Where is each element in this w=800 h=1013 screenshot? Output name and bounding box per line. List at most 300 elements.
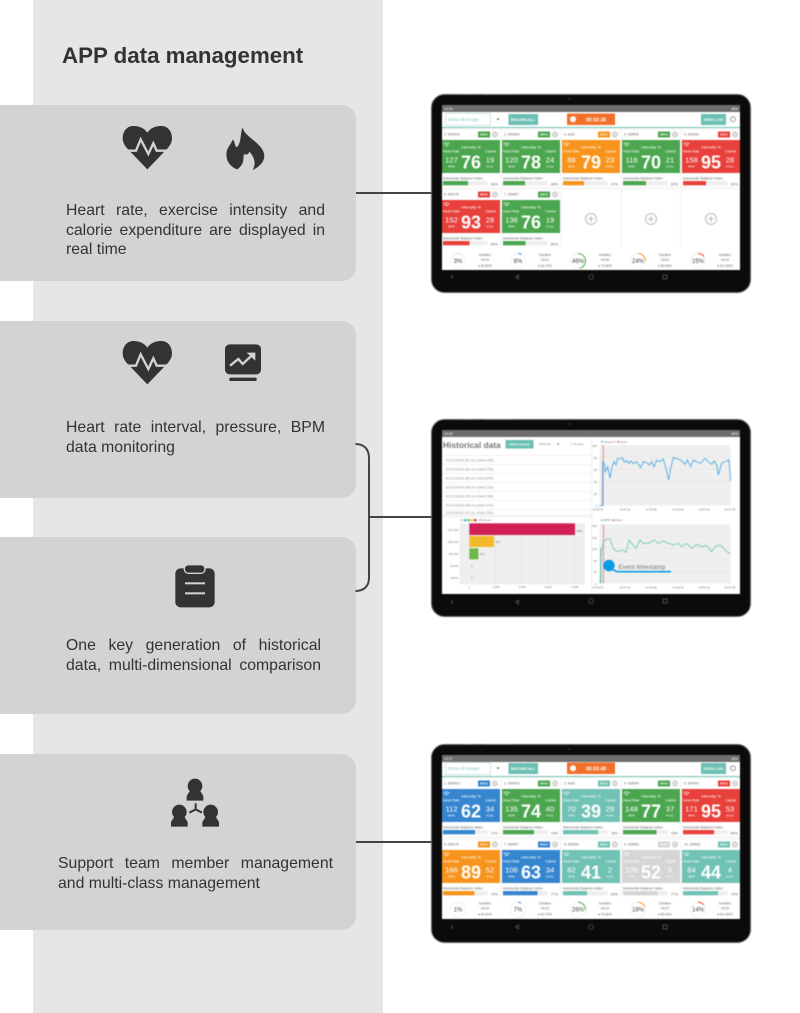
app header: [442, 762, 740, 777]
HR zones bar chart: HR Zones: [478, 518, 492, 522]
card 7: BPM: [508, 224, 515, 228]
zone stats row: 00:10: [601, 907, 609, 911]
card 5: [682, 130, 740, 187]
card 10: 44: [701, 863, 721, 883]
card 5: 5. ID#434: [684, 132, 699, 136]
card 5: Autonomic Balance Index: [683, 176, 723, 180]
zone stats row: Duration: [719, 253, 731, 257]
card 3: Autonomic Balance Index: [563, 826, 603, 830]
zone stats row: ♥ 70-80%: [598, 264, 612, 268]
card 3: 23: [606, 156, 614, 164]
card 2: REC0: [540, 133, 548, 137]
card 2: BPM: [508, 814, 515, 818]
HR zones bar chart: 0: [471, 564, 473, 568]
text: historical data: One key generation of historical: [66, 637, 321, 654]
stress line chart: [592, 440, 736, 512]
card 1: 1. ID#4HO: [444, 782, 460, 786]
card 4: REC0: [660, 133, 668, 137]
card 10: Calorie: [725, 860, 736, 864]
status bar: 14:35: [444, 432, 453, 436]
card 5: Intensity %: [701, 144, 721, 150]
card 2: Autonomic Balance Index: [503, 826, 543, 830]
BPM line chart: 14:15:08: [645, 586, 657, 590]
icon: team: [171, 778, 219, 827]
card 9: 105: [625, 866, 638, 874]
card 2: [502, 779, 560, 836]
zone stats row: 18%: [632, 908, 645, 914]
card 1: Calorie: [485, 150, 496, 154]
card 3: REC0: [600, 782, 608, 786]
card 8: 41: [581, 863, 601, 883]
app header: OPEN LOG: [703, 767, 724, 771]
card 3: 79: [581, 153, 601, 173]
card 4: KCAL: [666, 814, 674, 818]
card 9: Heart Rate: [623, 860, 640, 864]
HR zones bar chart: 95-108: [449, 552, 458, 556]
card 2: KCAL: [546, 814, 554, 818]
zone stats row: Duration: [719, 902, 731, 906]
text: real-time display: [66, 202, 325, 258]
card 2: 70%: [551, 832, 559, 836]
card 9: 5: [668, 866, 672, 874]
HR zones bar chart: 81-95: [451, 564, 458, 568]
card 8: REC0: [600, 843, 608, 847]
card 1: KCAL: [486, 164, 494, 168]
card 8: Heart Rate: [563, 860, 580, 864]
card 4: Autonomic Balance Index: [623, 176, 663, 180]
zone stats row: ♥ 90-100%: [717, 264, 733, 268]
card 5: Heart Rate: [683, 798, 700, 802]
card 6: 52: [486, 866, 494, 874]
card 7: 106: [505, 866, 518, 874]
status bar: 42%: [731, 432, 738, 436]
stress line chart: 15:07:55: [724, 508, 736, 512]
card 3: BPM: [568, 164, 575, 168]
card 4: 52%: [671, 182, 679, 186]
card 7: 19: [546, 216, 554, 224]
card 9: [622, 840, 680, 897]
card 4: [622, 130, 680, 187]
card 10: REC0: [720, 843, 728, 847]
status bar: 46%: [731, 757, 738, 761]
card 6: Intensity %: [461, 854, 481, 860]
stress line chart: 80: [594, 456, 597, 460]
card 10: [682, 840, 740, 897]
text: historical data: [66, 637, 321, 674]
zone stats row: 3%: [454, 259, 463, 265]
file list: 20211126JEL366.csv (Data:1265): [446, 486, 493, 490]
card 2: Heart Rate: [503, 798, 520, 802]
HR zones bar chart: 108-122: [447, 540, 458, 544]
card 8: Intensity %: [581, 854, 601, 860]
BPM line chart: [592, 518, 736, 590]
HR zones bar chart: 122-136: [447, 528, 458, 532]
card 5: Heart Rate: [683, 150, 700, 154]
card 3: 39: [581, 802, 601, 822]
card 7: Calorie: [545, 860, 556, 864]
card 6: KCAL: [486, 224, 494, 228]
HR zones bar chart: 1,000: [492, 585, 500, 589]
card 3: 47%: [611, 182, 619, 186]
card 6: BPM: [448, 874, 455, 878]
card 1: 62: [461, 802, 481, 822]
stress line chart: 60: [594, 468, 597, 472]
stress line chart: 100: [592, 444, 597, 448]
text: historical data: data, multi-dimensional comparison: [66, 657, 321, 674]
card 5: 5. ID#434: [684, 782, 699, 786]
zone stats row: Duration: [539, 253, 551, 257]
card 1: Autonomic Balance Index: [443, 826, 483, 830]
card 7: REC0: [540, 843, 548, 847]
zone stats row: Duration: [479, 902, 491, 906]
icon: heart rate 2: [122, 341, 172, 384]
card 8: KCAL: [606, 874, 614, 878]
card 7: 136: [505, 216, 518, 224]
card 7: KCAL: [546, 224, 554, 228]
view folder button: 7 min avg: [570, 442, 583, 446]
app header: Show All Groups: [448, 117, 479, 122]
icon: flame: [226, 128, 264, 170]
stress line chart: Stress %: [604, 440, 616, 444]
stress line chart: 0: [595, 504, 597, 508]
card 1: [442, 779, 500, 836]
card 7: Heart Rate: [503, 210, 520, 214]
file list: [442, 438, 592, 594]
connector: bracket to tablet: [356, 443, 432, 592]
zone stats row: 24%: [632, 259, 645, 265]
view folder button: [506, 440, 583, 448]
BPM line chart: Event: [615, 518, 623, 522]
card 7: Autonomic Balance Index: [503, 236, 543, 240]
card 4: 21: [666, 156, 674, 164]
card 8: 82: [567, 866, 576, 874]
zone stats row: ♥ 80-90%: [658, 264, 672, 268]
app header: [442, 112, 740, 128]
card 5: 95: [701, 802, 721, 822]
card 6: REC0: [480, 193, 488, 197]
card 3: 78%: [611, 832, 619, 836]
zone stats row: 14%: [692, 908, 705, 914]
card 7: [502, 190, 560, 248]
file list: 20211126JEL359.csv (Data:1394): [446, 494, 493, 498]
card 8: BPM: [568, 874, 575, 878]
card 2: BPM: [508, 164, 515, 168]
card 2: Autonomic Balance Index: [503, 176, 543, 180]
card 5: BPM: [688, 814, 695, 818]
card 2: 74: [521, 802, 541, 822]
card 2: 2. ID#4SD: [504, 132, 520, 136]
navigation buttons: [451, 599, 667, 604]
card 7: BPM: [508, 874, 515, 878]
card 7: 34: [546, 866, 554, 874]
card 2: 120: [505, 156, 518, 164]
app header: Show All Groups: [448, 766, 479, 771]
card 8: 8. ID#526: [564, 842, 579, 846]
card 3: 70: [567, 804, 576, 814]
card 6: 6. ID#176: [444, 842, 459, 846]
card 4: 37: [666, 804, 674, 814]
BPM line chart: 80: [594, 559, 597, 563]
card 2: Heart Rate: [503, 150, 520, 154]
card 3: Autonomic Balance Index: [563, 176, 603, 180]
callout: event timestamp: [603, 560, 671, 572]
zone stats row: 00:01: [541, 258, 549, 262]
status bar: [442, 105, 740, 112]
card 4: [622, 779, 680, 836]
card 1: KCAL: [486, 814, 494, 818]
card 1: Heart Rate: [443, 798, 460, 802]
empty slots: [562, 190, 740, 248]
card 2: Intensity %: [521, 794, 541, 798]
zone stats row: 8%: [514, 259, 523, 265]
stress line chart: 14:50:19: [698, 508, 710, 512]
HR zones bar chart: 4,000: [571, 585, 579, 589]
card 10: BPM: [688, 874, 695, 878]
card 4: Calorie: [665, 798, 676, 802]
card 5: Intensity %: [701, 794, 721, 798]
card 4: 70: [641, 153, 661, 173]
card 7: 7. ID#507: [504, 842, 519, 846]
zone stats row: 26%: [572, 908, 585, 914]
BPM line chart: 13:39:57: [592, 586, 604, 590]
card 5: 158: [685, 156, 698, 164]
zone stats row: 46%: [572, 259, 585, 265]
card 9: 9. ID#583: [624, 842, 639, 846]
card 6: [442, 840, 500, 897]
card 3: KCAL: [606, 164, 614, 168]
card 3: BPM: [568, 814, 575, 818]
tablet: historical data: [430, 418, 752, 618]
card 6: 70%: [491, 892, 499, 896]
card 4: Intensity %: [641, 794, 661, 798]
card 4: 116: [625, 156, 638, 164]
card 8: Calorie: [605, 860, 616, 864]
card 5: 95: [701, 153, 721, 173]
zone stats row: 00:08: [601, 258, 609, 262]
stress line chart: 40: [594, 480, 597, 484]
card 7: Heart Rate: [503, 860, 520, 864]
card 3: Calorie: [605, 150, 616, 154]
card 3: 3. test1: [564, 132, 575, 136]
icon: clipboard: [175, 565, 215, 608]
card 1: Autonomic Balance Index: [443, 176, 483, 180]
card 3: Calorie: [605, 798, 616, 802]
card 5: Calorie: [725, 798, 736, 802]
zone stats row: 00:07: [661, 907, 669, 911]
BPM line chart: 14:50:19: [698, 586, 710, 590]
card 8: 2: [608, 866, 612, 874]
status bar: 46%: [731, 107, 738, 111]
card 9: 77%: [671, 892, 679, 896]
card 3: [562, 130, 620, 187]
status bar: 14:34: [444, 107, 453, 111]
card 4: KCAL: [666, 164, 674, 168]
BPM line chart: 0: [595, 582, 597, 586]
view folder button: Show All: [539, 442, 551, 446]
HR zones bar chart: [447, 518, 585, 589]
historical data heading: Historical data: [443, 440, 501, 450]
card 5: KCAL: [726, 164, 734, 168]
callout: event timestamp: Event timestamp: [618, 564, 666, 571]
card 1: REC0: [480, 133, 488, 137]
card 4: 4. ID#509: [624, 782, 639, 786]
zone stats row: 00:00: [481, 258, 489, 262]
file list: 20211126JEL357.csv (Data:1300): [446, 511, 493, 515]
text: real-time display: real time: [66, 241, 127, 258]
card 3: 29: [606, 804, 614, 814]
card 5: 171: [685, 804, 698, 814]
card 2: KCAL: [546, 164, 554, 168]
card 2: Calorie: [545, 150, 556, 154]
BPM line chart: 14:32:43: [672, 586, 684, 590]
zone stats row: ♥ 90-100%: [717, 913, 733, 917]
HR zones bar chart: 0: [471, 576, 473, 580]
card 10: Intensity %: [701, 854, 721, 860]
file list: 20211126JEL380.csv (Data:3295): [446, 476, 493, 480]
card 10: 4: [728, 866, 732, 874]
card 2: 135: [505, 804, 518, 814]
zone stats row: ♥ 60-70%: [538, 264, 552, 268]
card 3: 88: [567, 156, 576, 164]
file list: 20211126JEL358.csv (Data:1041): [446, 504, 493, 508]
card 6: REC0: [480, 843, 488, 847]
card 10: 79%: [731, 892, 739, 896]
zone stats row: 1%: [454, 908, 463, 914]
zone stats row: 00:02: [541, 907, 549, 911]
file list: 20211126JEL387.csv (Data:1298): [446, 458, 493, 462]
card 6: Heart Rate: [443, 210, 460, 214]
card 10: 84: [687, 866, 696, 874]
icon: trend chart monitor: [225, 344, 261, 381]
stress line chart: 20: [594, 492, 597, 496]
zone stats row: [442, 248, 740, 270]
text: team management: Support team member management: [58, 855, 333, 872]
card 4: Heart Rate: [623, 798, 640, 802]
card 4: 75%: [671, 832, 679, 836]
card 2: 40: [546, 804, 554, 814]
card 6: Intensity %: [461, 204, 481, 210]
card 4: Autonomic Balance Index: [623, 826, 663, 830]
zone stats row: ♥ 50-60%: [478, 264, 492, 268]
card 6: [442, 190, 500, 248]
zone stats row: 00:04: [661, 258, 669, 262]
panel: historical data: [0, 537, 356, 714]
card 9: 52: [641, 863, 661, 883]
card 7: [502, 840, 560, 897]
card 1: 19: [486, 156, 494, 164]
BPM line chart: 15:07:55: [724, 586, 736, 590]
app header: 00:02:36: [586, 117, 606, 123]
navigation buttons: [451, 275, 667, 279]
zone stats row: Duration: [599, 253, 611, 257]
HR zones bar chart: 68-81: [451, 576, 458, 580]
HR zones bar chart: 2,000: [518, 585, 526, 589]
BPM line chart: 120: [592, 547, 597, 551]
BPM line chart: 13:57:32: [619, 586, 631, 590]
card 9: Autonomic Balance Index: [623, 886, 663, 890]
stress line chart: 14:15:08: [645, 508, 657, 512]
card 1: [442, 130, 500, 187]
status bar: 14:37: [444, 757, 453, 761]
card 4: 148: [625, 804, 638, 814]
zone stats row: [442, 897, 740, 919]
card 1: REC0: [480, 782, 488, 786]
tablet: team dashboard: [430, 743, 752, 944]
panel: heart rate monitoring: [0, 321, 356, 498]
text: heart rate monitoring: [66, 419, 325, 456]
card 4: Intensity %: [641, 144, 661, 150]
card 10: 10. ID#551: [684, 842, 701, 846]
HR zones bar chart: 936: [496, 540, 501, 544]
card 2: 78: [521, 153, 541, 173]
panel: real-time display: [0, 105, 356, 281]
card 1: 72%: [491, 832, 499, 836]
card 9: REC0: [660, 843, 668, 847]
app header: RECORD ALL: [511, 118, 536, 122]
card 10: KCAL: [726, 874, 734, 878]
card 6: 152: [445, 216, 458, 224]
stress line chart: 14:32:43: [672, 508, 684, 512]
card 6: Heart Rate: [443, 860, 460, 864]
card 1: 76: [461, 153, 481, 173]
card 4: Calorie: [665, 150, 676, 154]
HR zones bar chart: 4082: [576, 529, 583, 533]
card 2: [502, 130, 560, 187]
card 7: 63: [521, 863, 541, 883]
app header: RECORD ALL: [511, 767, 536, 771]
card 1: Intensity %: [461, 794, 481, 798]
card 1: 127: [445, 156, 458, 164]
card 7: Autonomic Balance Index: [503, 886, 543, 890]
stress line chart: Event: [620, 440, 628, 444]
HR zones bar chart: 0: [468, 585, 470, 589]
file list: 20211126JEL381.csv (Data:1098): [446, 468, 493, 472]
background band: [33, 0, 383, 1013]
BPM line chart: BPM: [604, 518, 611, 522]
BPM line chart: 160: [592, 536, 597, 540]
card 6: Calorie: [485, 860, 496, 864]
zone stats row: ♥ 80-90%: [658, 913, 672, 917]
text: real-time display: calorie expenditure are displayed in: [66, 222, 325, 239]
card 1: BPM: [448, 814, 455, 818]
card 5: Autonomic Balance Index: [683, 826, 723, 830]
navigation buttons: [451, 925, 667, 929]
connector: panel 1 to tablet: [356, 192, 432, 194]
card 7: 77%: [551, 892, 559, 896]
zone stats row: 00:02: [721, 258, 729, 262]
card 7: REC0: [540, 193, 548, 197]
card 4: BPM: [628, 814, 635, 818]
BPM line chart: 40: [594, 570, 597, 574]
app header: 00:03:49: [586, 766, 606, 772]
card 3: [562, 779, 620, 836]
card 7: 76: [521, 213, 541, 233]
card 5: REC0: [720, 133, 728, 137]
card 6: 93: [461, 213, 481, 233]
zone stats row: Duration: [539, 902, 551, 906]
card 5: 69%: [731, 832, 739, 836]
text: heart rate monitoring: data monitoring: [66, 439, 175, 456]
zone stats row: Duration: [599, 902, 611, 906]
text: team management: [58, 855, 333, 892]
card 4: Heart Rate: [623, 150, 640, 154]
title: APP data management: [62, 43, 303, 68]
zone stats row: 00:05: [721, 907, 729, 911]
zone stats row: ♥ 50-60%: [478, 913, 492, 917]
card 6: BPM: [448, 224, 455, 228]
card 6: Calorie: [485, 210, 496, 214]
app header: OPEN LOG: [703, 118, 724, 122]
